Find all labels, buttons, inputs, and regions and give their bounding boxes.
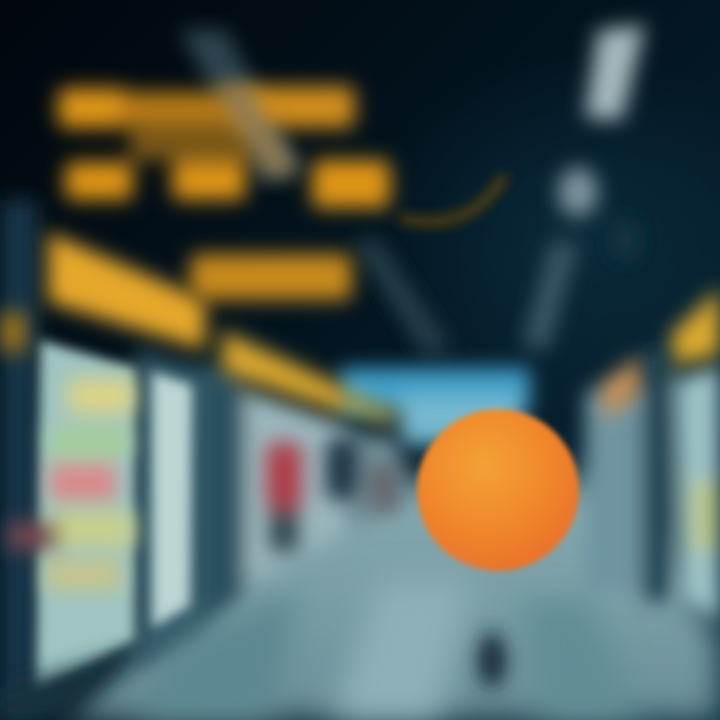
floor reflections <box>130 580 640 720</box>
sign line 3 <box>190 254 352 300</box>
blurred orange sign text <box>58 86 390 300</box>
bottom left vignette <box>0 650 135 720</box>
figures in corridor <box>266 438 507 688</box>
back wall glow <box>340 368 530 445</box>
sign line 2 <box>65 160 390 208</box>
left shop window <box>36 340 192 695</box>
ceiling haze <box>360 50 720 430</box>
sign line 1 <box>58 86 355 128</box>
corridor floor <box>60 480 720 720</box>
sign swoosh <box>400 175 505 222</box>
left storefront wall <box>0 200 400 720</box>
yellow awnings <box>0 232 720 425</box>
sign diagonal light <box>215 85 300 180</box>
right storefront <box>585 350 720 620</box>
ceiling light streaks <box>180 25 645 355</box>
orange sphere <box>417 409 579 571</box>
shop window goods <box>8 378 134 590</box>
